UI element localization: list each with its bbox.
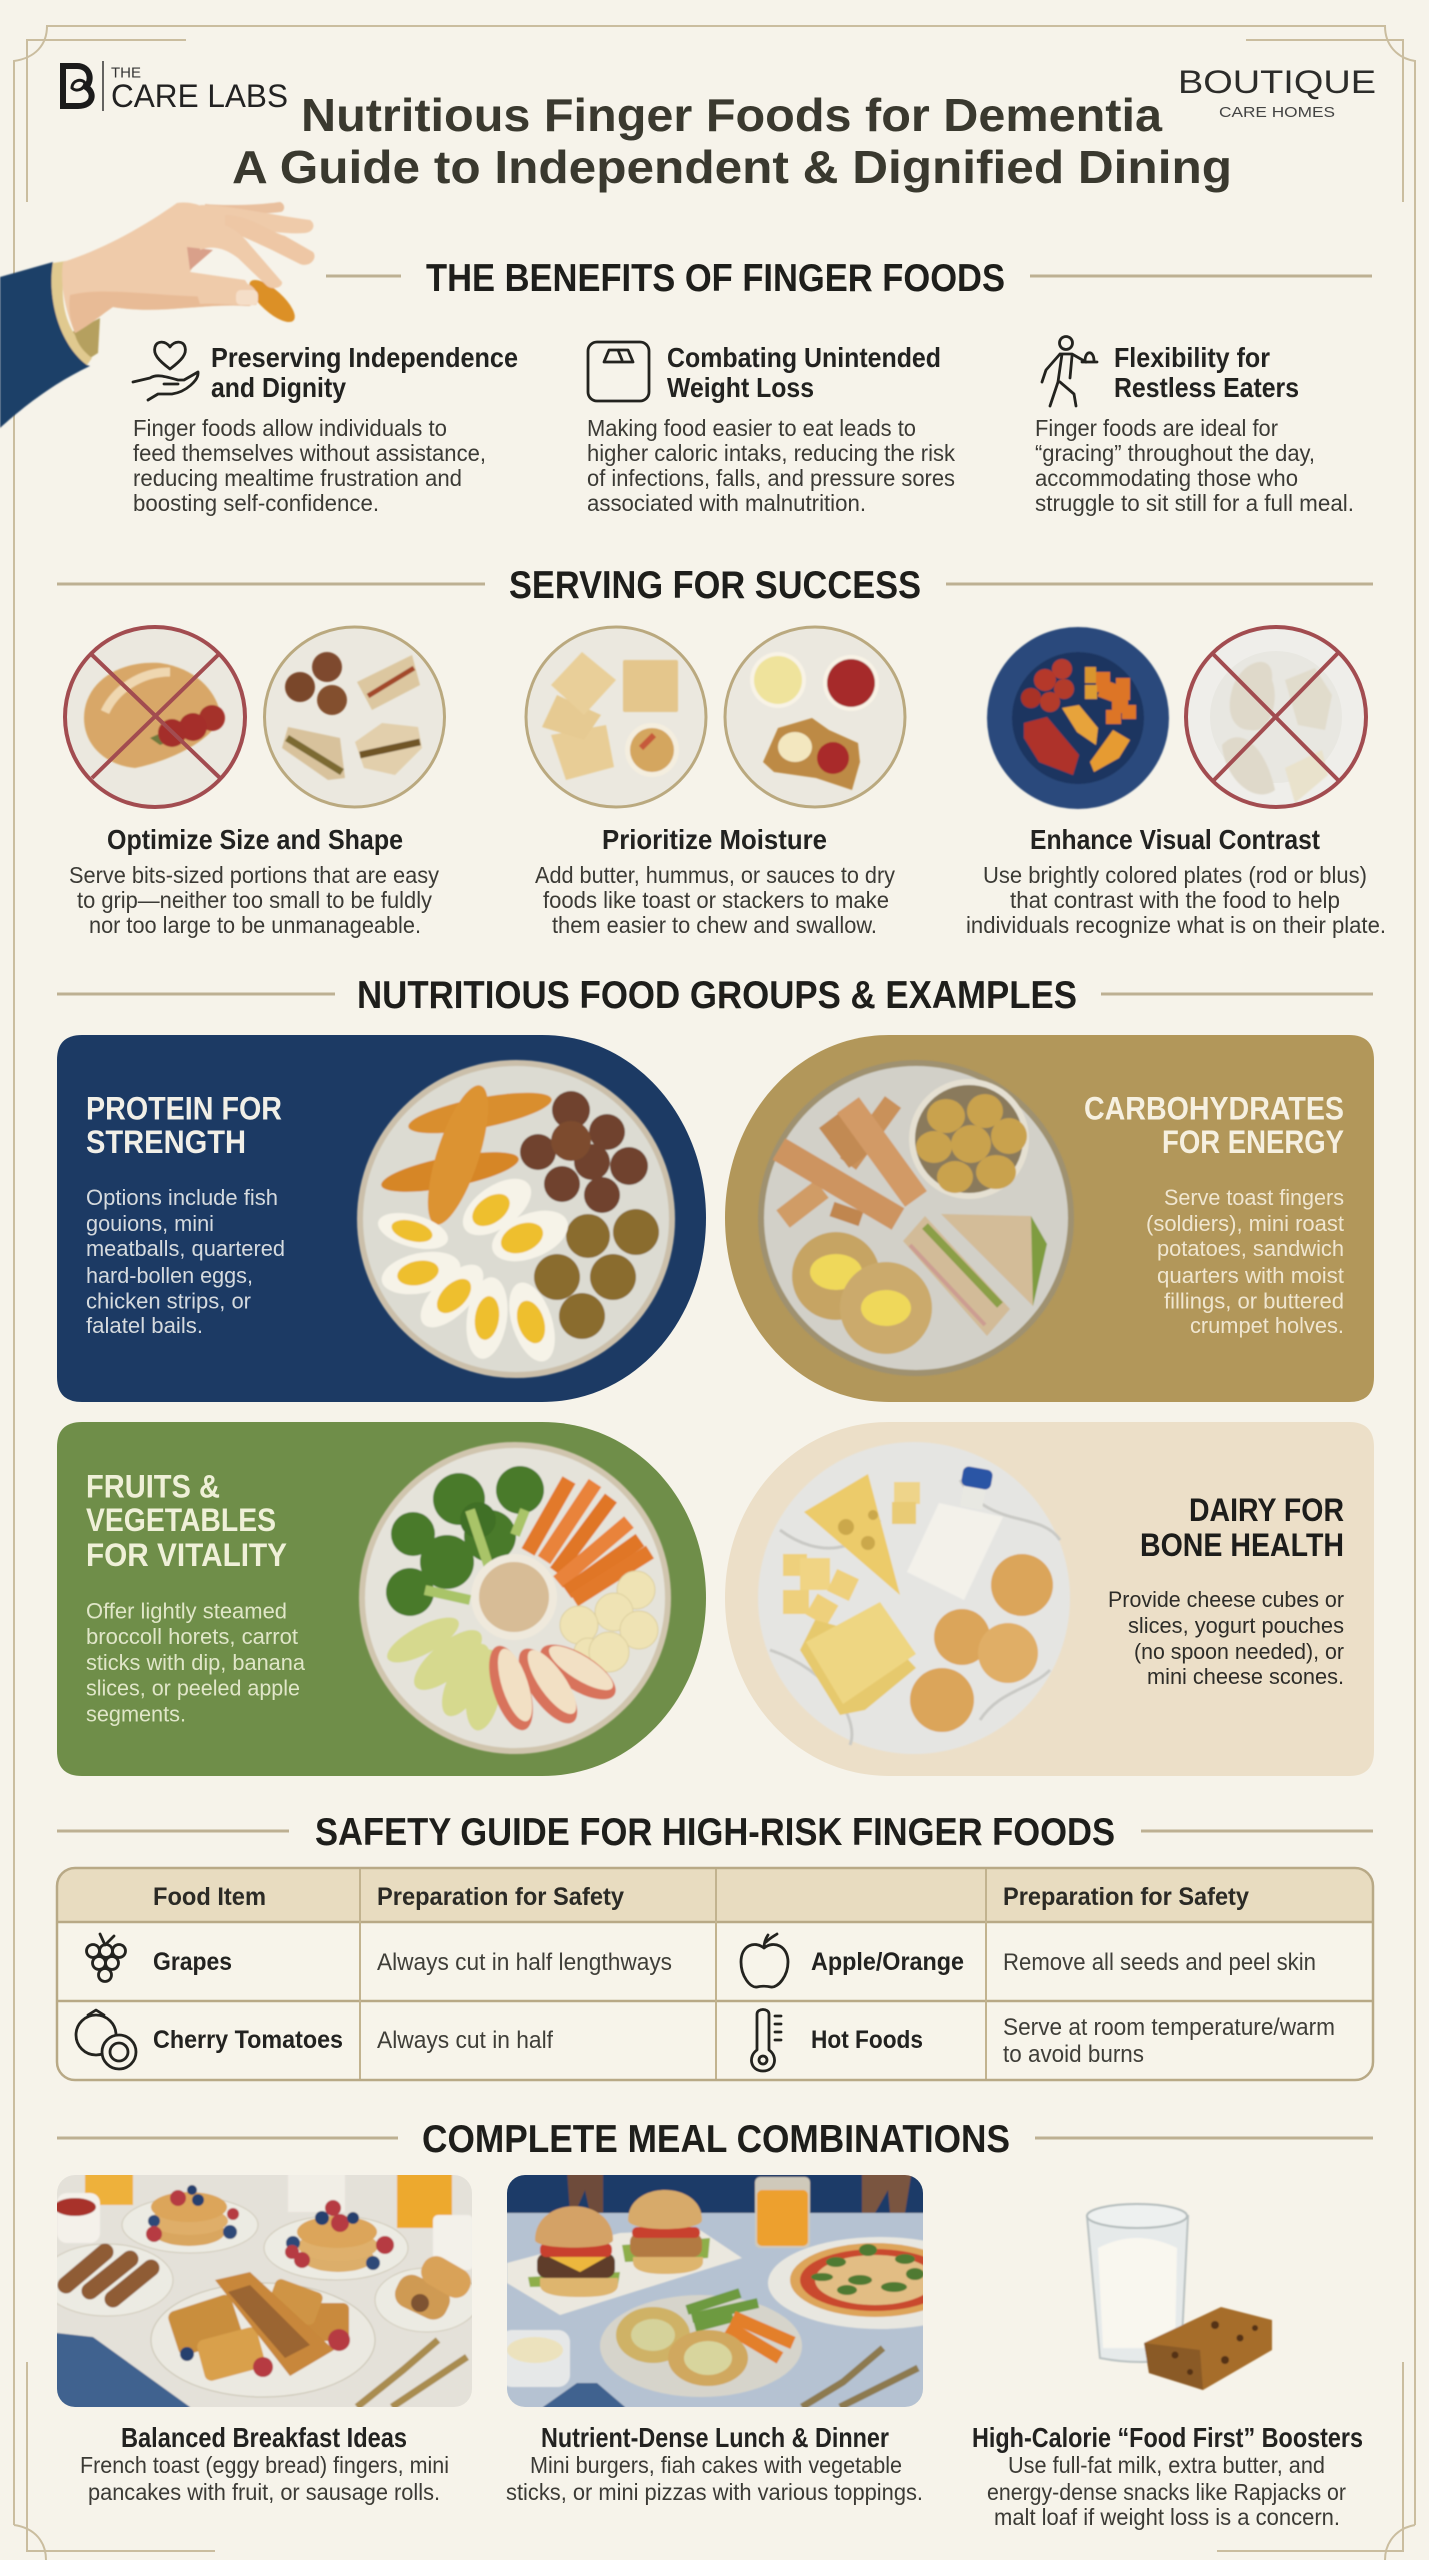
panel: dairy: Provide cheese cubes or bbox=[1108, 1587, 1344, 1612]
safety table bbox=[57, 1868, 1373, 2080]
panel: preserving independence: and Dignity bbox=[211, 372, 346, 403]
title: Nutritious Finger Foods for Dementia bbox=[301, 89, 1162, 141]
panel: balanced breakfast bbox=[41, 2170, 480, 2505]
row: cherry tomatoes: Always cut in half bbox=[377, 2027, 553, 2054]
icon: grapes bbox=[86, 1934, 126, 1982]
row: hot foods: to avoid burns bbox=[1003, 2041, 1144, 2068]
title bbox=[232, 89, 1232, 193]
icon: thermometer bbox=[751, 2010, 781, 2071]
panel: fruits and vegetables: VEGETABLES bbox=[86, 1502, 276, 1538]
panel: flexibility: accommodating those who bbox=[1035, 465, 1298, 491]
illustration: fruit and vegetable plate bbox=[359, 1442, 671, 1754]
panel: protein: STRENGTH bbox=[86, 1124, 246, 1160]
panel: combating weight loss: of infections, falls, and pressure sores bbox=[587, 465, 955, 491]
panel: carbohydrates: Serve toast fingers bbox=[1164, 1185, 1344, 1210]
logo: The Care Labs bbox=[63, 61, 288, 114]
panel: high-calorie boosters: High-Calorie “Food First” Boosters bbox=[972, 2422, 1363, 2453]
panel: carbohydrates: quarters with moist bbox=[1157, 1263, 1345, 1288]
panel: lunch and dinner: Mini burgers, fiah cakes with vegetable bbox=[530, 2452, 902, 2478]
panel: optimize size and shape: to grip—neither too small to be fuldly bbox=[77, 887, 432, 913]
panel: preserving independence: Preserving Independence bbox=[211, 342, 518, 373]
panel: balanced breakfast: Balanced Breakfast Ideas bbox=[121, 2422, 407, 2453]
row: apple/orange bbox=[741, 1934, 1316, 1987]
section heading: benefits: THE BENEFITS OF FINGER FOODS bbox=[426, 257, 1005, 300]
icon: walking person with food bbox=[1042, 336, 1097, 406]
panel: fruits and vegetables: FOR VITALITY bbox=[86, 1537, 287, 1573]
table header: Preparation for Safety bbox=[377, 1883, 624, 1911]
panel: enhance visual contrast: Use brightly colored plates (rod or blus) bbox=[983, 862, 1367, 888]
panel: high-calorie boosters: Use full-fat milk, extra butter, and bbox=[1008, 2452, 1325, 2478]
panel: fruits and vegetables: slices, or peeled apple bbox=[86, 1676, 300, 1701]
table header: Preparation for Safety bbox=[1003, 1883, 1249, 1911]
panel: combating weight loss: higher caloric intaks, reducing the risk bbox=[587, 440, 955, 466]
icon: blue plate with colourful food bbox=[987, 627, 1169, 809]
logo: Boutique Care Homes bbox=[1178, 64, 1376, 121]
panel: flexibility: Restless Eaters bbox=[1114, 372, 1299, 403]
panel: preserving independence: boosting self-confidence. bbox=[133, 490, 379, 516]
row: hot foods: Serve at room temperature/warm bbox=[1003, 2014, 1335, 2041]
panel: protein: Options include fish bbox=[86, 1185, 278, 1210]
icon: bite-sized sandwiches and meatballs bbox=[264, 627, 444, 807]
row: hot foods: Hot Foods bbox=[811, 2026, 923, 2054]
panel: prioritize moisture: them easier to chew and swallow. bbox=[552, 912, 877, 938]
panel: dairy bbox=[725, 1422, 1374, 1776]
section heading: meal combinations: COMPLETE MEAL COMBINATIONS bbox=[422, 2118, 1010, 2161]
row: hot foods bbox=[751, 2010, 1335, 2071]
panel: carbohydrates: CARBOHYDRATES bbox=[1084, 1090, 1344, 1126]
panel: optimize size and shape: Optimize Size and Shape bbox=[107, 824, 403, 855]
panel: preserving independence: Finger foods allow individuals to bbox=[133, 415, 447, 441]
panel: preserving independence: feed themselves without assistance, bbox=[133, 440, 486, 466]
panel: flexibility: struggle to sit still for a full meal. bbox=[1035, 490, 1354, 516]
illustration: dairy board bbox=[758, 1442, 1070, 1754]
panel: carbohydrates: fillings, or buttered bbox=[1164, 1288, 1344, 1314]
panel: fruits and vegetables bbox=[57, 1422, 706, 1776]
icon: white plate crossed out bbox=[1186, 627, 1366, 807]
icon: sauces with toast bbox=[725, 627, 905, 807]
logo: The Care Labs: THE bbox=[111, 66, 141, 82]
panel: flexibility: “gracing” throughout the day, bbox=[1035, 440, 1315, 466]
illustration: protein plate bbox=[357, 1060, 675, 1378]
row: cherry tomatoes: Cherry Tomatoes bbox=[153, 2026, 343, 2054]
icon: apple bbox=[741, 1934, 788, 1987]
icon: cherry tomato bbox=[76, 2010, 136, 2069]
logo: Boutique Care Homes: CARE HOMES bbox=[1219, 104, 1335, 121]
panel: balanced breakfast: French toast (eggy bread) fingers, mini bbox=[80, 2452, 449, 2478]
panel: carbohydrates: (soldiers), mini roast bbox=[1146, 1211, 1345, 1236]
title: A Guide to Independent & Dignified Dining bbox=[232, 141, 1232, 193]
panel: prioritize moisture: Prioritize Moisture bbox=[602, 824, 827, 855]
table header: Food Item bbox=[153, 1883, 266, 1911]
illustration: breakfast table bbox=[57, 2175, 472, 2407]
panel: enhance visual contrast: individuals recognize what is on their plate. bbox=[966, 912, 1386, 938]
panel: balanced breakfast: pancakes with fruit, or sausage rolls. bbox=[88, 2479, 440, 2505]
icon: large roll crossed out bbox=[65, 627, 245, 807]
panel: high-calorie boosters bbox=[972, 2204, 1363, 2530]
row: grapes: Grapes bbox=[153, 1948, 232, 1976]
panel: fruits and vegetables: FRUITS & bbox=[86, 1469, 220, 1505]
panel: enhance visual contrast: that contrast with the food to help bbox=[1010, 887, 1340, 913]
panel: protein: chicken strips, or bbox=[86, 1288, 251, 1314]
row: apple/orange: Remove all seeds and peel skin bbox=[1003, 1949, 1316, 1976]
panel: preserving independence bbox=[133, 342, 518, 516]
panel: preserving independence: reducing mealtime frustration and bbox=[133, 465, 462, 491]
panel: lunch and dinner bbox=[506, 2175, 923, 2505]
panel: carbohydrates: potatoes, sandwich bbox=[1157, 1236, 1344, 1261]
panel: combating weight loss: associated with malnutrition. bbox=[587, 490, 866, 516]
panel: protein: falatel bails. bbox=[86, 1313, 203, 1338]
panel: protein: hard-bollen eggs, bbox=[86, 1263, 253, 1288]
panel: high-calorie boosters: malt loaf if weight loss is a concern. bbox=[994, 2504, 1340, 2530]
panel: dairy: (no spoon needed), or bbox=[1134, 1639, 1344, 1664]
section heading: safety guide: SAFETY GUIDE FOR HIGH-RISK FINGER FOODS bbox=[315, 1811, 1115, 1854]
panel: optimize size and shape: Serve bits-sized portions that are easy bbox=[69, 862, 439, 888]
panel: dairy: slices, yogurt pouches bbox=[1128, 1613, 1344, 1638]
panel: flexibility: Flexibility for bbox=[1114, 342, 1270, 373]
panel: dairy: DAIRY FOR bbox=[1189, 1492, 1344, 1528]
panel: flexibility: Finger foods are ideal for bbox=[1035, 415, 1278, 441]
panel: fruits and vegetables: broccoll horets, carrot bbox=[86, 1624, 299, 1649]
illustration: milk glass and snack bar bbox=[1087, 2204, 1272, 2390]
panel: prioritize moisture bbox=[526, 627, 905, 938]
panel: optimize size and shape bbox=[65, 627, 444, 938]
row: grapes: Always cut in half lengthways bbox=[377, 1949, 672, 1976]
row: grapes bbox=[86, 1934, 672, 1982]
panel: fruits and vegetables: segments. bbox=[86, 1702, 186, 1726]
panel: flexibility bbox=[1035, 336, 1354, 516]
panel: carbohydrates: FOR ENERGY bbox=[1162, 1124, 1344, 1160]
panel: combating weight loss: Weight Loss bbox=[667, 372, 814, 403]
panel: prioritize moisture: foods like toast or stackers to make bbox=[543, 887, 889, 913]
panel: prioritize moisture: Add butter, hummus, or sauces to dry bbox=[535, 862, 895, 888]
panel: lunch and dinner: sticks, or mini pizzas with various toppings. bbox=[506, 2479, 923, 2505]
panel: enhance visual contrast bbox=[966, 627, 1386, 938]
row: cherry tomatoes bbox=[76, 2010, 553, 2069]
panel: fruits and vegetables: sticks with dip, banana bbox=[86, 1650, 305, 1675]
panel: lunch and dinner: Nutrient-Dense Lunch & Dinner bbox=[541, 2422, 889, 2453]
section heading: serving: SERVING FOR SUCCESS bbox=[509, 564, 921, 607]
illustration: lunch and dinner table bbox=[507, 2175, 923, 2407]
panel: combating weight loss bbox=[587, 342, 955, 516]
panel: protein: gouions, mini bbox=[86, 1211, 214, 1236]
icon: crackers with hummus bbox=[526, 627, 706, 807]
panel: optimize size and shape: nor too large to be unmanageable. bbox=[89, 912, 421, 938]
panel: fruits and vegetables: Offer lightly steamed bbox=[86, 1598, 287, 1624]
icon: weighing scale bbox=[588, 342, 649, 401]
logo: Boutique Care Homes: BOUTIQUE bbox=[1178, 64, 1376, 100]
panel: protein: PROTEIN FOR bbox=[86, 1090, 282, 1126]
panel: combating weight loss: Combating Unintended bbox=[667, 342, 941, 373]
section heading: food groups: NUTRITIOUS FOOD GROUPS & EXAMPLES bbox=[357, 974, 1077, 1017]
panel: carbohydrates: crumpet holves. bbox=[1190, 1313, 1344, 1338]
illustration: carbohydrate plate bbox=[758, 1060, 1074, 1376]
table header bbox=[153, 1883, 1249, 1911]
panel: combating weight loss: Making food easier to eat leads to bbox=[587, 415, 916, 441]
logo: The Care Labs: CARE LABS bbox=[111, 78, 288, 114]
icon: heart in hand bbox=[133, 342, 198, 400]
panel: enhance visual contrast: Enhance Visual Contrast bbox=[1030, 824, 1320, 855]
panel: carbohydrates bbox=[725, 1035, 1374, 1402]
panel: dairy: mini cheese scones. bbox=[1147, 1664, 1344, 1689]
panel: dairy: BONE HEALTH bbox=[1140, 1527, 1344, 1563]
illustration: hand holding finger food bbox=[0, 202, 315, 428]
panel: high-calorie boosters: energy-dense snacks like Rapjacks or bbox=[987, 2479, 1346, 2505]
row: apple/orange: Apple/Orange bbox=[811, 1948, 964, 1976]
panel: protein bbox=[57, 1035, 706, 1402]
panel: protein: meatballs, quartered bbox=[86, 1236, 285, 1261]
